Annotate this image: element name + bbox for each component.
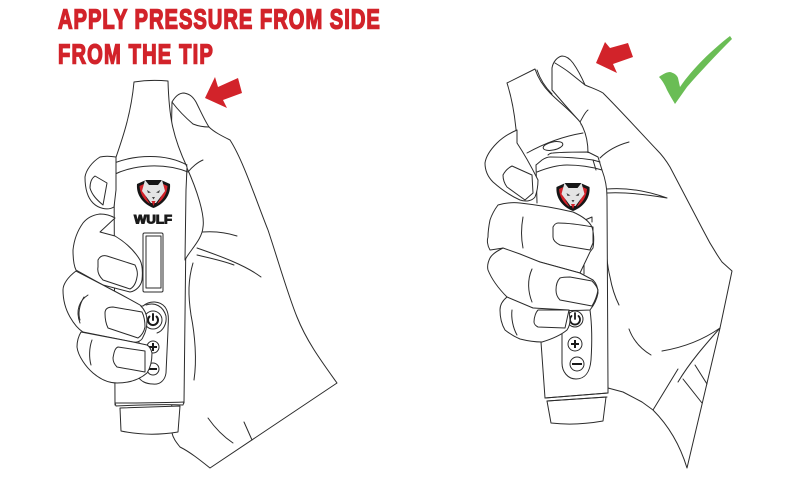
left arrow bbox=[205, 77, 242, 108]
plus button bbox=[568, 337, 582, 351]
right device body bbox=[507, 69, 608, 424]
power button bbox=[144, 311, 162, 329]
title: FROM THE TIP bbox=[58, 39, 213, 70]
illustration: right hand holding device bbox=[485, 42, 732, 468]
power button bbox=[567, 311, 583, 327]
left wordmark: WULF bbox=[134, 212, 172, 226]
right buttons panel bbox=[562, 310, 592, 379]
plus button bbox=[147, 341, 159, 353]
left device body bbox=[113, 80, 203, 434]
title: APPLY PRESSURE FROM SIDE bbox=[58, 4, 380, 35]
green check mark bbox=[659, 36, 732, 104]
minus button bbox=[147, 363, 159, 375]
left logo bbox=[137, 180, 170, 208]
right arrow bbox=[596, 42, 633, 73]
left fingers bbox=[63, 156, 152, 383]
right logo bbox=[556, 183, 590, 211]
title bbox=[58, 4, 380, 70]
right hand back and wrist bbox=[552, 56, 732, 468]
left hand back and wrist bbox=[170, 93, 337, 468]
left buttons panel bbox=[138, 302, 168, 384]
illustration: left hand holding device bbox=[63, 77, 337, 468]
left screen bbox=[143, 233, 163, 292]
right screen edge bbox=[563, 217, 592, 274]
minus button bbox=[570, 357, 584, 371]
right fingers bbox=[485, 130, 598, 342]
